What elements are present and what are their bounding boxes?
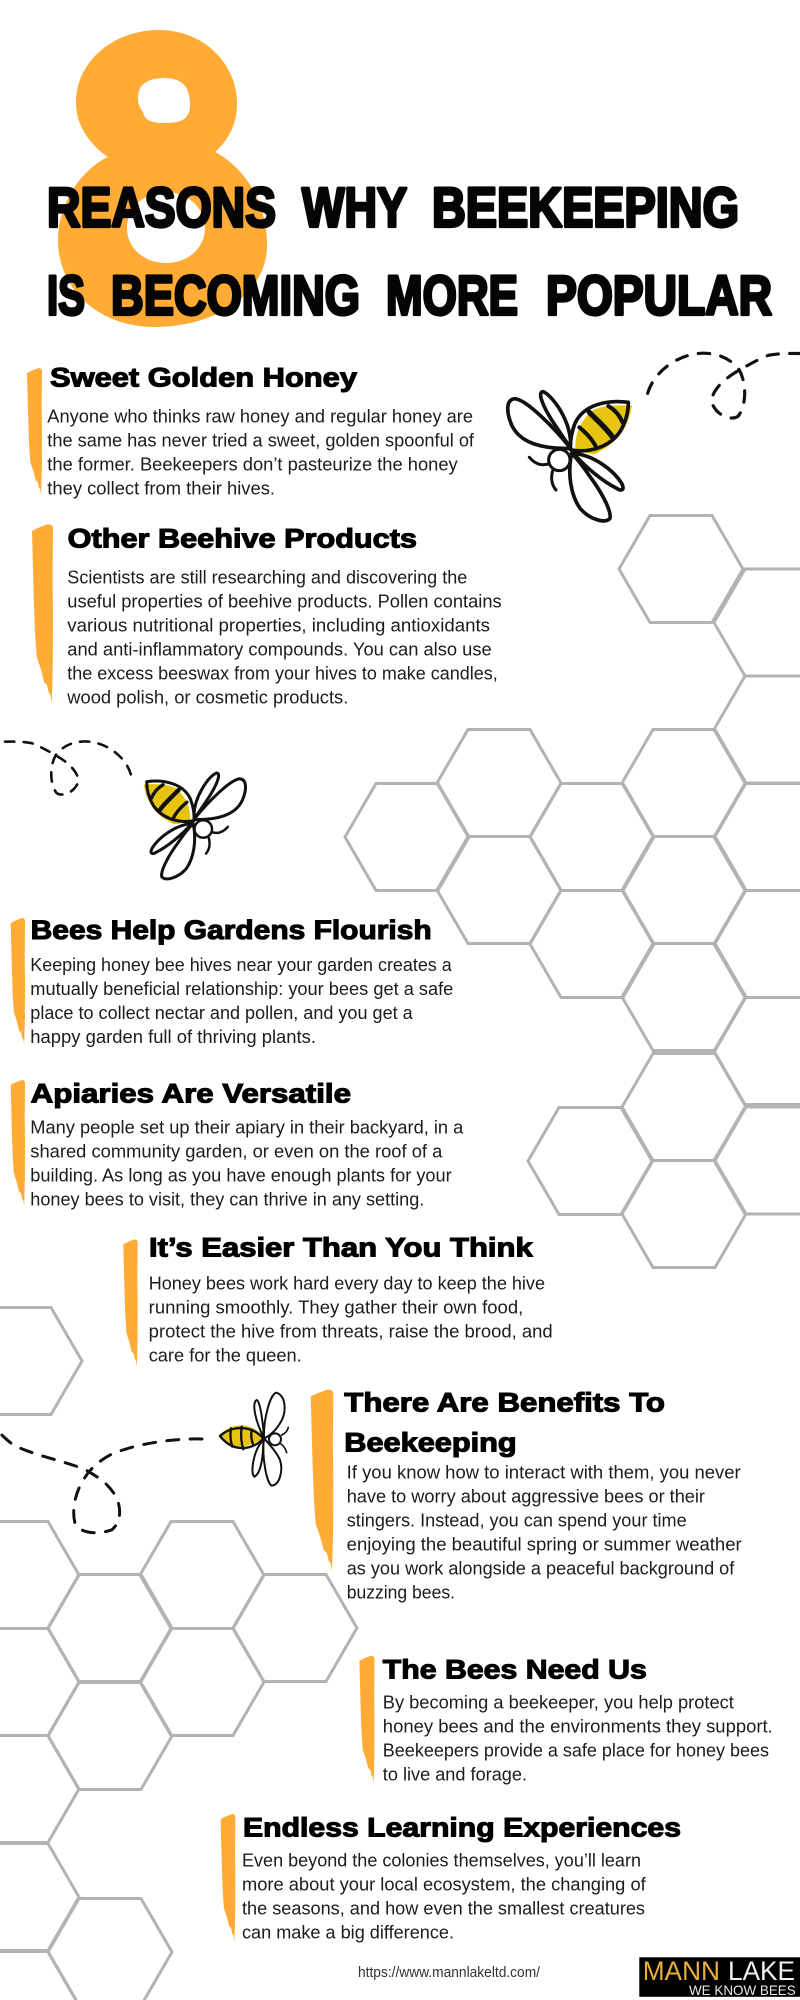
heading: The Bees Need Us — [383, 1654, 647, 1684]
brush mark — [123, 1239, 138, 1366]
honeycomb: right side — [345, 516, 800, 1268]
panel: It's Easier Than You Think — [123, 1233, 553, 1366]
body text: mutually beneficial relationship: your bees get a safe — [30, 978, 453, 999]
heading: Other Beehive Products — [68, 523, 417, 553]
source url: https://www.mannlakeltd.com/ — [358, 1964, 541, 1981]
body text: wood polish, or cosmetic products. — [66, 686, 348, 707]
body text: If you know how to interact with them, you never — [347, 1461, 741, 1482]
panel: Bees Help Gardens Flourish — [11, 915, 453, 1047]
logo: Mann Lake: WE KNOW BEES — [689, 1982, 796, 1998]
heading — [344, 1388, 665, 1458]
heading: There Are Benefits To — [344, 1388, 665, 1418]
panel: The Bees Need Us — [359, 1654, 773, 1784]
body text: Keeping honey bee hives near your garden creates a — [30, 954, 452, 975]
body text: they collect from their hives. — [47, 477, 275, 498]
body text: various nutritional properties, including antioxidants — [67, 614, 490, 635]
brush mark — [311, 1390, 333, 1571]
heading: It’s Easier Than You Think — [149, 1233, 534, 1263]
brush mark — [11, 1080, 25, 1206]
body text: honey bees and the environments they support. — [383, 1715, 773, 1736]
body text: the same has never tried a sweet, golden spoonful of — [47, 429, 475, 450]
panel: Sweet Golden Honey — [27, 363, 475, 498]
honeycomb: left side — [0, 1308, 357, 2000]
body text: By becoming a beekeeper, you help protect — [383, 1691, 734, 1712]
body text: protect the hive from threats, raise the brood, and — [149, 1320, 553, 1341]
body text: Even beyond the colonies themselves, you’ll learn — [242, 1850, 641, 1871]
body text: and anti-inflammatory compounds. You can also use — [67, 638, 492, 659]
body text — [242, 1850, 647, 1943]
body text: enjoying the beautiful spring or summer weather — [347, 1533, 742, 1554]
body text — [47, 405, 475, 498]
logo: Mann Lake — [639, 1956, 800, 1998]
body text: the seasons, and how even the smallest creatures — [242, 1898, 645, 1919]
body text: building. As long as you have enough plants for your — [30, 1164, 452, 1185]
title: REASONS — [47, 176, 276, 238]
body text: honey bees to visit, they can thrive in any setting. — [30, 1188, 424, 1209]
body text — [149, 1272, 553, 1365]
panel: Endless Learning Experiences — [221, 1813, 681, 1943]
body text: Honey bees work hard every day to keep the hive — [149, 1272, 545, 1293]
brush mark — [32, 524, 53, 703]
panel: There Are Benefits To Beekeeping — [311, 1388, 742, 1602]
body text: the excess beeswax from your hives to make candles, — [67, 662, 498, 683]
body text: happy garden full of thriving plants. — [30, 1026, 316, 1047]
body text: Beekeepers provide a safe place for honey bees — [383, 1739, 769, 1760]
heading: Beekeeping — [344, 1428, 517, 1458]
body text: Scientists are still researching and discovering the — [67, 566, 467, 587]
title: MORE — [386, 264, 518, 326]
icon: bee with dashed flight path, top right — [508, 353, 800, 521]
brush mark — [27, 368, 42, 495]
body text: as you work alongside a peaceful background of — [347, 1557, 735, 1578]
body text: can make a big difference. — [242, 1922, 454, 1943]
body text — [383, 1691, 773, 1784]
body text: stingers. Instead, you can spend your time — [347, 1509, 687, 1530]
body text: to live and forage. — [383, 1763, 527, 1784]
body text — [347, 1461, 742, 1602]
body text: Anyone who thinks raw honey and regular honey are — [47, 405, 473, 426]
heading: Sweet Golden Honey — [50, 363, 357, 393]
brush mark — [221, 1814, 235, 1941]
title: WHY — [302, 176, 407, 238]
heading: Apiaries Are Versatile — [31, 1079, 351, 1109]
title: BEEKEEPING — [432, 176, 739, 238]
panel: Other Beehive Products — [32, 523, 502, 707]
body text — [30, 954, 453, 1047]
body text: Many people set up their apiary in their backyard, in a — [30, 1116, 464, 1137]
title: BECOMING — [111, 264, 360, 326]
brush mark — [11, 918, 25, 1045]
body text: shared community garden, or even on the roof of a — [30, 1140, 443, 1161]
body text: the former. Beekeepers don’t pasteurize the honey — [47, 453, 458, 474]
logo: Mann Lake: LAKE — [728, 1956, 795, 1986]
body text: buzzing bees. — [347, 1581, 455, 1602]
title — [47, 176, 772, 326]
body text: care for the queen. — [149, 1344, 302, 1365]
logo: Mann Lake: MANN — [643, 1956, 720, 1986]
body text — [66, 566, 502, 707]
body text: running smoothly. They gather their own food, — [149, 1296, 523, 1317]
body text: have to worry about aggressive bees or their — [347, 1485, 705, 1506]
icon: bee with dashed flight path, left — [0, 741, 246, 879]
panel: Apiaries Are Versatile — [11, 1079, 464, 1209]
icon: small bee with dashed flight path, middle — [0, 1393, 288, 1533]
body text: useful properties of beehive products. Pollen contains — [67, 590, 502, 611]
heading: Endless Learning Experiences — [243, 1813, 681, 1843]
brush mark — [359, 1656, 374, 1783]
body text: place to collect nectar and pollen, and you get a — [30, 1002, 413, 1023]
body text: more about your local ecosystem, the changing of — [242, 1874, 647, 1895]
heading: Bees Help Gardens Flourish — [31, 915, 432, 945]
title: IS — [47, 264, 85, 326]
body text — [30, 1116, 464, 1209]
